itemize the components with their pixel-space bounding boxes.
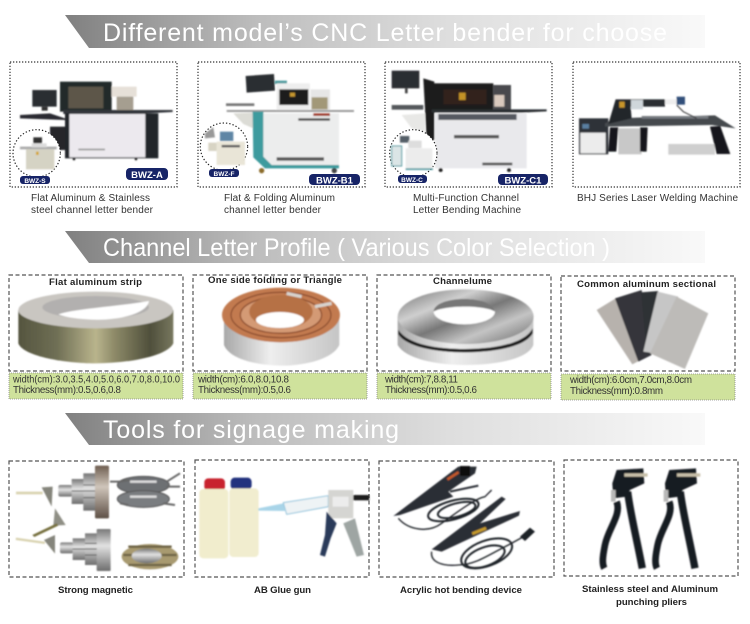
image: color sample sheets [597, 290, 708, 369]
illustration: BWZ-C1 machine [392, 71, 547, 172]
caption: strong magnetic: Strong magnetic [58, 585, 134, 596]
heading: different models: Different model’s CNC Letter bender for choose [103, 19, 667, 47]
panel: BHJ laser welder [573, 62, 740, 204]
panel: AB glue gun [195, 460, 369, 596]
panel: acrylic hot bending device [379, 461, 554, 596]
spec box: channelume [377, 373, 551, 399]
caption: BHJ: BHJ Series Laser Welding Machine [577, 193, 738, 204]
label: BWZ-F: BWZ-F [214, 171, 234, 178]
spec box: channelume: Thickness(mm):0.5,0.6 [385, 385, 478, 396]
caption: punching pliers: Stainless steel and Aluminum [582, 584, 718, 595]
label: BWZ-A: BWZ-A [131, 170, 163, 181]
caption: punching pliers [582, 584, 718, 608]
image: magnets and clamps [16, 466, 180, 571]
caption: BWZ-C1: Letter Bending Machine [413, 205, 521, 216]
panel: one side folding or triangle [193, 275, 367, 399]
panel: BWZ-C1 machine [385, 62, 552, 216]
caption: AB glue gun: AB Glue gun [254, 585, 311, 596]
image: hot bending tools [393, 466, 535, 574]
heading: channel letter profile: Channel Letter Profile ( Various Color Selection ) [103, 234, 610, 262]
illustration: BWZ-B1 machine [226, 74, 354, 173]
image: two pliers [603, 468, 700, 568]
panel: common aluminum sectional [561, 276, 735, 400]
image: copper coil [222, 288, 340, 366]
title: flat aluminum strip: Flat aluminum strip [49, 277, 142, 288]
caption: punching pliers: punching pliers [616, 597, 687, 608]
caption: BWZ-A: steel channel letter bender [31, 205, 154, 216]
inset: BWZ-S machine [13, 130, 60, 177]
spec box: one side folding: Thickness(mm):0.5,0.6 [198, 385, 292, 396]
panel: flat aluminum strip [9, 275, 183, 399]
caption: acrylic device: Acrylic hot bending device [400, 585, 522, 596]
panel: strong magnetic [9, 461, 184, 596]
spec box: common sectional: Thickness(mm):0.8mm [570, 386, 663, 397]
caption: BWZ-B1 [224, 193, 335, 216]
title: channelume: Channelume [433, 276, 492, 287]
image: aluminum coil [18, 292, 173, 363]
label: BWZ-S [20, 176, 50, 185]
caption: BWZ-C1 [413, 193, 521, 216]
label: BWZ-S: BWZ-S [24, 178, 46, 185]
label: BWZ-F [209, 169, 239, 178]
spec box: one side folding: width(cm):6.0,8.0,10.8 [197, 374, 290, 386]
caption: BWZ-B1: Flat & Folding Aluminum [224, 193, 335, 204]
illustration: laser welding machine [579, 97, 736, 155]
spec box: channelume: width(cm):7,8.8,11 [384, 374, 458, 386]
label: BWZ-B1: BWZ-B1 [316, 176, 354, 186]
image: glue bottles and gun [199, 478, 369, 558]
spec box: flat strip: width(cm):3.0,3.5,4.0,5.0,6.0,7.0,8.0,10.0 [12, 374, 181, 386]
label: BWZ-A [126, 168, 168, 181]
label: BWZ-C [398, 175, 427, 184]
caption: BWZ-A [31, 193, 154, 216]
caption: BWZ-A: Flat Aluminum & Stainless [31, 193, 150, 204]
caption: BWZ-B1: channel letter bender [224, 205, 322, 216]
label: BWZ-C: BWZ-C [401, 177, 423, 184]
spec box: common sectional: width(cm):6.0cm,7.0cm,8.0cm [569, 375, 692, 386]
label: BWZ-C1 [498, 174, 548, 186]
inset: BWZ-F machine [200, 123, 248, 170]
title: one side folding: One side folding or Triangle [208, 275, 342, 286]
heading: tools for signage making [65, 413, 705, 445]
title: common aluminum sectional: Common aluminum sectional [577, 279, 716, 290]
panel: punching pliers [564, 460, 738, 608]
label: BWZ-C1: BWZ-C1 [505, 176, 542, 186]
spec box: flat strip [9, 373, 183, 399]
spec box: one side folding [193, 373, 367, 399]
spec box: flat strip: Thickness(mm):0.5,0.6,0.8 [13, 385, 122, 396]
label: BWZ-B1 [309, 174, 360, 186]
image: channelume coil [398, 289, 534, 365]
panel: channelume [377, 275, 551, 399]
caption: BWZ-C1: Multi-Function Channel [413, 193, 519, 204]
panel: BWZ-B1 machine [198, 62, 365, 216]
panel: BWZ-A machine [10, 62, 177, 216]
heading: tools for signage making: Tools for signage making [103, 416, 399, 444]
inset: BWZ-C machine [390, 130, 437, 177]
illustration: BWZ-A machine [20, 82, 173, 160]
spec box: common sectional [561, 374, 735, 400]
